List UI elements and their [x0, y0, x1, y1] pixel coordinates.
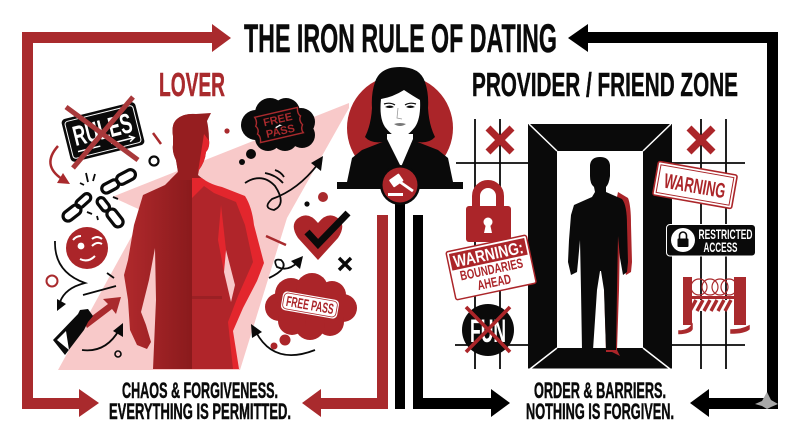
caption right — [526, 378, 674, 424]
judge woman with gavel — [337, 67, 463, 205]
curved red arrow — [50, 146, 70, 184]
black curved arrow left — [55, 241, 85, 311]
red dash upper — [153, 133, 161, 144]
warning stamp — [653, 161, 737, 209]
broken chain — [61, 168, 137, 229]
man silhouette: provider — [568, 157, 632, 356]
red x right — [689, 128, 713, 152]
crossed out fun — [462, 304, 514, 356]
thought cloud: free pass ticket: FREE — [262, 111, 294, 129]
looping arrow upper right — [245, 156, 323, 210]
caption right: ORDER & BARRIERS. — [534, 378, 666, 403]
black x — [339, 258, 351, 270]
caption left: EVERYTHING IS PERMITTED. — [109, 399, 291, 424]
winking face — [66, 227, 108, 269]
center divider line — [395, 195, 405, 409]
restricted access sign: ACCESS — [704, 239, 738, 255]
caption right: NOTHING IS FORGIVEN. — [526, 399, 674, 424]
red frame arrow top-left — [22, 24, 231, 417]
thought cloud: free pass ticket — [239, 98, 315, 165]
thought cloud: free pass ticket: PASS — [265, 123, 296, 141]
man silhouette: lover — [124, 113, 264, 369]
rules sign crossed out: RULES — [70, 107, 135, 152]
pink spotlight — [58, 103, 349, 370]
warning sign: boundaries ahead: AHEAD — [476, 271, 513, 293]
curved arrow lower right — [251, 324, 315, 355]
small looping arrow — [269, 256, 303, 278]
crossed out fun: FUN — [470, 313, 506, 349]
warning sign: boundaries ahead: WARNING: — [452, 238, 525, 271]
barrier with razor wire — [679, 277, 749, 334]
red cloud: free pass: FREE PASS — [285, 294, 335, 318]
red arrow and black hand — [53, 297, 121, 355]
title: THE IRON RULE OF DATING — [244, 17, 557, 61]
red frame arrow bottom-right — [302, 215, 388, 417]
doorway — [528, 124, 672, 369]
small ring red — [46, 276, 58, 286]
fence grid left — [455, 119, 528, 369]
fence grid right — [672, 119, 745, 369]
caption left — [109, 378, 291, 424]
restricted access sign — [666, 224, 756, 256]
black ring — [150, 156, 158, 166]
watermark sparkle — [755, 392, 778, 409]
small ring black — [115, 351, 121, 357]
caption left: CHAOS & FORGIVENESS. — [122, 378, 278, 403]
black frame arrow top-right — [568, 24, 778, 417]
heading: lover: LOVER — [159, 66, 225, 103]
dashes — [83, 273, 116, 295]
restricted access sign: RESTRICTED — [698, 226, 752, 242]
warning sign: boundaries ahead — [446, 235, 536, 300]
heart with checkmark — [294, 213, 348, 260]
red x left — [488, 128, 512, 152]
red dash right — [266, 236, 286, 245]
red dot — [224, 128, 230, 134]
warning stamp: WARNING — [662, 170, 727, 203]
rules sign crossed out — [61, 97, 145, 168]
warning sign: boundaries ahead: BOUNDARIES — [459, 255, 524, 283]
dots near heart — [304, 192, 328, 207]
curved arrow lower left — [82, 323, 123, 350]
black frame arrow bottom-left — [413, 215, 510, 417]
red padlock — [466, 184, 511, 242]
red cloud: free pass — [265, 273, 357, 350]
